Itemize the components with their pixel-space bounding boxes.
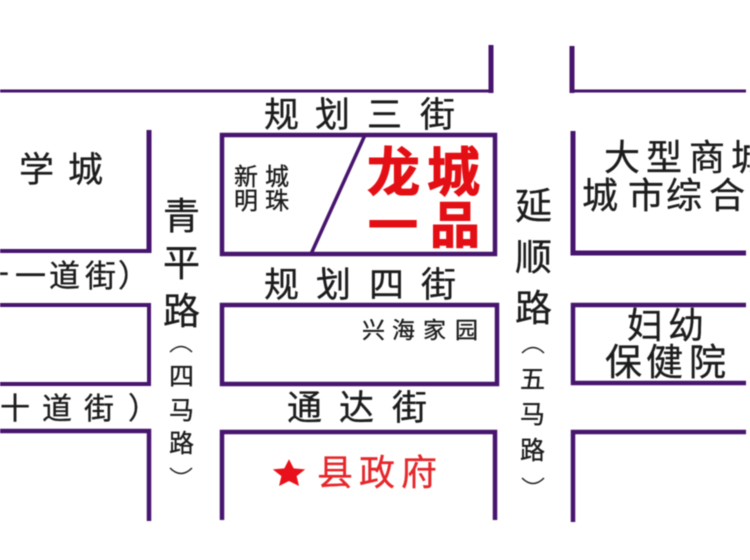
road label: 延顺路: 路 xyxy=(515,288,552,329)
label: 一品: 一品 xyxy=(368,198,480,254)
road label: 五马路 xyxy=(520,348,545,484)
road label: 青平路: 平 xyxy=(163,243,200,284)
label: 新城明珠 second line: 明珠 xyxy=(234,188,289,215)
icon: red star xyxy=(273,459,305,486)
block: 县政府 xyxy=(222,432,495,520)
label: 学城: 学城 xyxy=(19,151,103,190)
street label: 通达街: 通达街 xyxy=(287,389,427,428)
block: top left xyxy=(0,45,491,93)
label: 妇幼: 妇幼 xyxy=(627,305,704,346)
street label: 十道街: 十道街） xyxy=(0,393,158,426)
label: 县政府: 县政府 xyxy=(317,452,437,493)
block: 大型商城 xyxy=(573,131,750,253)
road label: 五马路: 路 xyxy=(520,437,545,465)
road label: 延顺路: 延 xyxy=(515,186,552,227)
street label: 规划三街: 规划三街 xyxy=(264,96,455,135)
label: 兴海家园: 兴海家园 xyxy=(362,317,478,343)
block: 妇幼保健院 xyxy=(573,305,746,383)
block: bottom right xyxy=(573,432,746,522)
road label: 青平路: 青 xyxy=(163,196,200,237)
road label: 青平路: 路 xyxy=(163,291,200,332)
road label: 五马路: 五 xyxy=(520,366,545,394)
road label: 四马路: 四 xyxy=(169,363,194,391)
block: 龙城一品 site xyxy=(222,135,495,254)
block: top right xyxy=(572,46,746,93)
road label: 四马路 xyxy=(169,346,194,474)
road label: 延顺路: 顺 xyxy=(515,237,552,278)
label: 龙城: 龙城 xyxy=(367,144,480,203)
label: 保健院: 保健院 xyxy=(605,342,726,383)
label: 新城明珠: 新城 xyxy=(234,164,289,191)
block: left middle xyxy=(0,305,149,384)
road label: 四马路: 路 xyxy=(169,430,194,458)
street label: 规划四街: 规划四街 xyxy=(264,266,456,305)
block: bottom left xyxy=(0,431,149,521)
road label: 四马路: 马 xyxy=(169,397,194,425)
road label: 五马路: 马 xyxy=(520,401,545,429)
block: 兴海家园 xyxy=(222,305,497,384)
